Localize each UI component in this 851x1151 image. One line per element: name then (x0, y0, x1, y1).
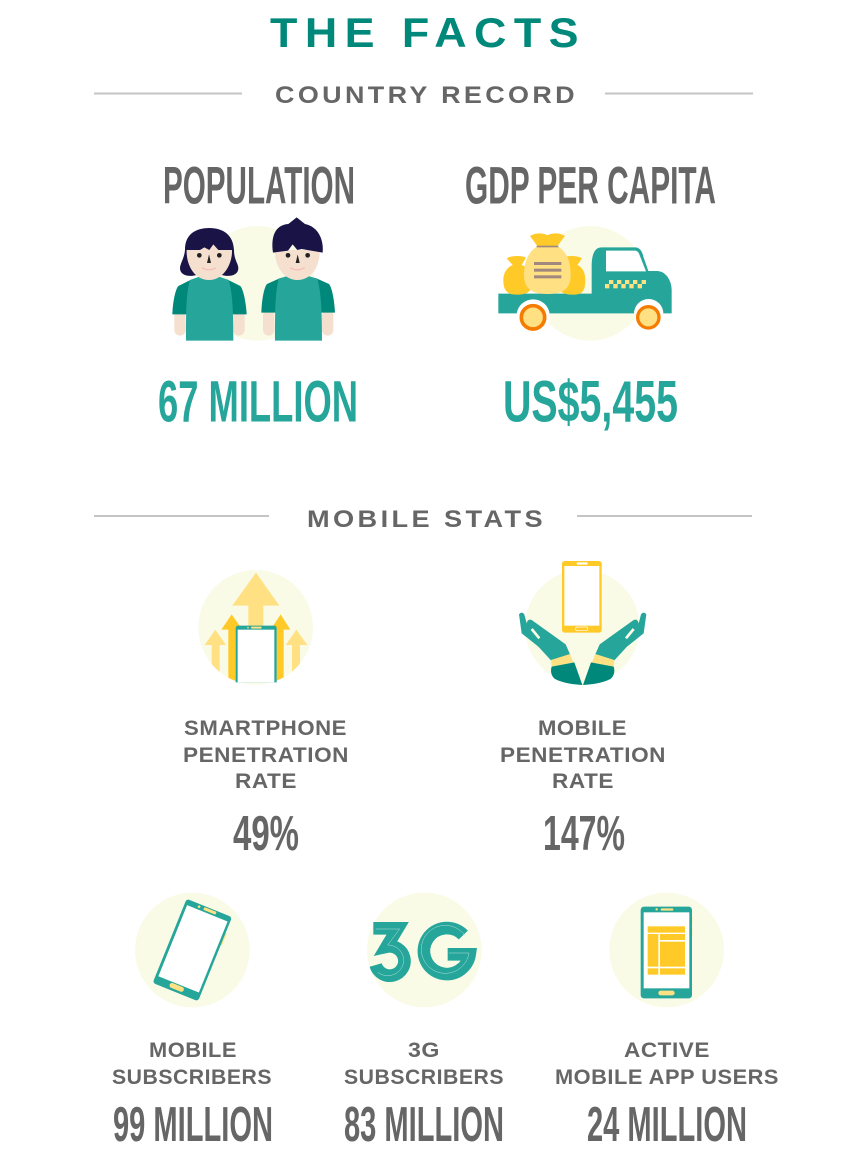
label (183, 717, 349, 793)
label (112, 1039, 272, 1089)
panel: mobile subscribers (112, 893, 273, 1151)
icon: two people (172, 217, 335, 341)
label: SUBSCRIBERS (344, 1066, 504, 1089)
icon: truck with money bags (498, 226, 672, 341)
icon: tilted phone (135, 893, 250, 1007)
label: RATE (235, 770, 297, 793)
label: MOBILE (149, 1039, 237, 1062)
label: RATE (552, 770, 614, 793)
heading: country record: COUNTRY RECORD (275, 82, 578, 109)
GDP value: US$5,455 (503, 370, 678, 434)
icon: phone with app layout (609, 893, 724, 1007)
label: ACTIVE (624, 1039, 710, 1062)
population heading: POPULATION (163, 156, 355, 216)
panel: mobile penetration rate (500, 561, 666, 861)
label: PENETRATION (183, 744, 349, 767)
icon: hands holding phone (519, 561, 646, 685)
label: 3G (408, 1039, 440, 1062)
value: 49% (233, 807, 299, 861)
label: SUBSCRIBERS (112, 1066, 272, 1089)
title: THE FACTS (270, 9, 586, 56)
population value: 67 MILLION (158, 370, 358, 434)
icon: phone with rising arrows (198, 570, 313, 688)
panel: GDP per capita (465, 156, 716, 434)
value: 83 MILLION (344, 1098, 504, 1151)
label (500, 717, 666, 793)
panel: smartphone penetration rate (183, 570, 349, 861)
label: PENETRATION (500, 744, 666, 767)
value: 147% (543, 807, 625, 861)
label (555, 1039, 779, 1089)
label: SMARTPHONE (184, 717, 347, 740)
panel: 3G subscribers (344, 893, 504, 1151)
label: MOBILE APP USERS (555, 1066, 779, 1089)
man (261, 217, 335, 341)
label: MOBILE (538, 717, 627, 740)
heading: mobile stats: MOBILE STATS (307, 506, 546, 533)
icon: 3G (367, 893, 482, 1007)
value: 99 MILLION (113, 1098, 273, 1151)
panel: active mobile app users (555, 893, 779, 1151)
panel: population (158, 156, 358, 434)
label (344, 1039, 504, 1089)
woman (172, 228, 247, 341)
